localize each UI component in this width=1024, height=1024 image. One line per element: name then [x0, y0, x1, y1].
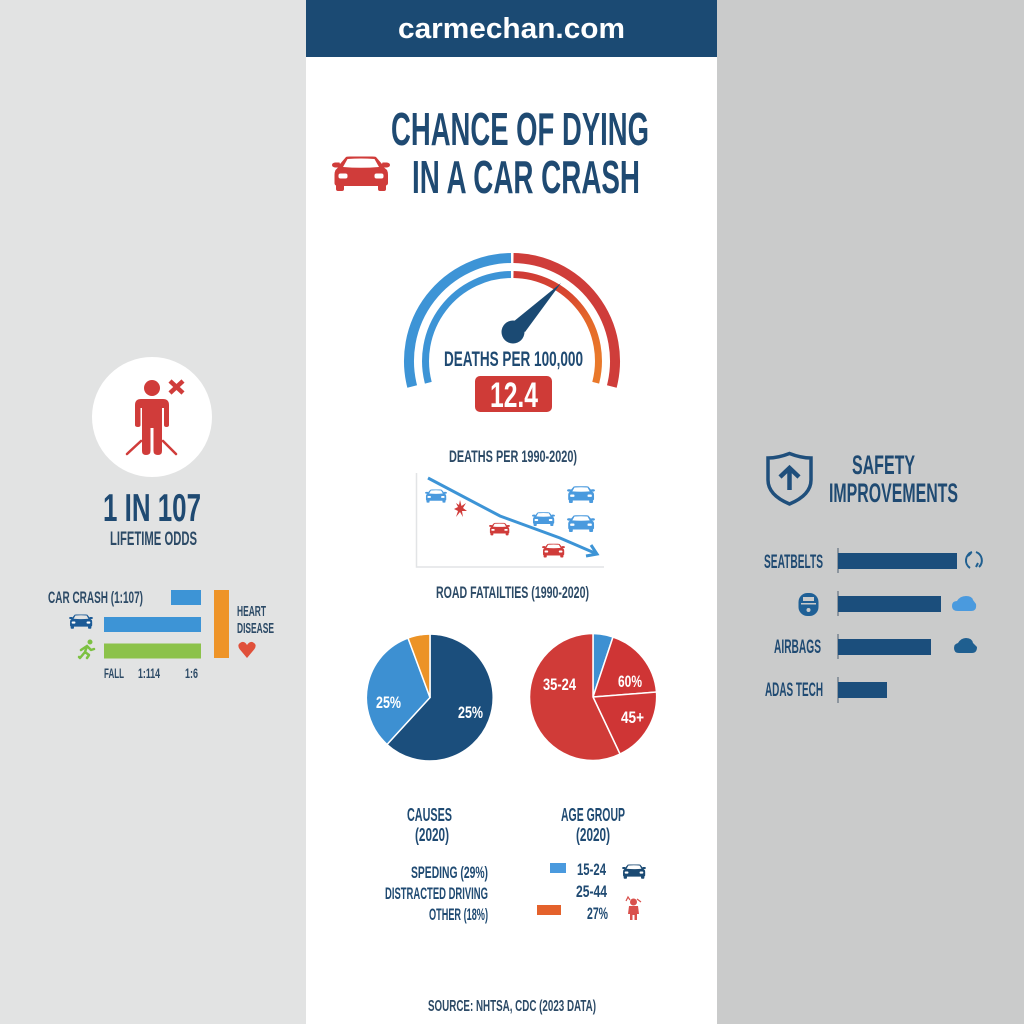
chart red car icons: [454, 500, 565, 557]
icon row: [798, 591, 976, 616]
source note: SOURCE: NHTSA, CDC (2023 DATA): [428, 998, 596, 1015]
causes heading: [407, 805, 452, 845]
age group legend: 15-24: [577, 860, 606, 879]
right background panel: [717, 0, 1024, 1024]
age group legend: 27%: [587, 904, 608, 923]
pie chart: causes: 25%: [458, 703, 483, 722]
gauge value: 12.4: [490, 376, 538, 415]
pie chart: age group: [530, 634, 657, 760]
axis values: 1:114: [138, 665, 160, 681]
trend line: [428, 478, 597, 556]
gauge needle: [502, 283, 561, 344]
age group heading: [561, 805, 625, 845]
age group heading: AGE GROUP: [561, 805, 625, 825]
icon: seat badge: [798, 593, 818, 616]
causes heading: CAUSES: [407, 805, 452, 825]
bars: [104, 590, 229, 658]
pie chart: causes: 25%: [376, 693, 401, 712]
causes legend: DISTRACTED DRIVING: [385, 884, 488, 903]
age group legend: [537, 860, 646, 923]
car crash label: CAR CRASH (1:107): [48, 588, 143, 607]
heart disease label: DISEASE: [237, 620, 274, 637]
header band: carmechan.com: [398, 13, 625, 45]
age group heading: (2020): [576, 825, 610, 845]
axis values: [104, 665, 198, 681]
heart disease label: HEART: [237, 603, 266, 620]
title: IN A CAR CRASH: [412, 151, 640, 203]
gauge: [409, 258, 615, 386]
icon: blue car: [69, 614, 93, 629]
causes legend: SPEDING (29%): [411, 863, 488, 882]
left background panel: [0, 0, 306, 1024]
icon: person at risk in white circle: [92, 357, 212, 477]
airbags row: [774, 634, 977, 659]
icon: small blue car: [622, 864, 646, 879]
lifetime odds label: LIFETIME ODDS: [110, 529, 197, 550]
icon: light blue cloud: [952, 596, 976, 611]
central white panel: [306, 0, 717, 1024]
pie chart: causes: [366, 634, 493, 761]
pie chart: age group: 35-24: [543, 675, 576, 694]
icon: seatbelt loops: [966, 552, 982, 568]
icon: running figure: [79, 640, 94, 658]
heart disease label: [237, 603, 274, 637]
seatbelts row: [764, 548, 982, 573]
line chart caption: ROAD FATAILTIES (1990-2020): [436, 583, 589, 602]
safety bar chart: [764, 548, 982, 703]
header band: [306, 0, 717, 57]
chart car icons: [425, 486, 595, 532]
airbags row: AIRBAGS: [774, 637, 821, 658]
icon: dark blue cloud: [954, 638, 977, 653]
pie chart: age group: 60%: [618, 672, 642, 691]
icon: heart: [238, 642, 256, 658]
adas tech row: ADAS TECH: [765, 680, 823, 701]
line chart: [416, 473, 604, 567]
age group legend: 25-44: [576, 882, 607, 901]
line chart heading: DEATHS PER 1990-2020): [449, 447, 577, 466]
causes legend: OTHER (18%): [429, 905, 488, 924]
comparison bar chart: [48, 588, 274, 681]
gauge label: DEATHS PER 100,000: [444, 348, 583, 371]
icon: red car: [332, 156, 390, 191]
axis values: 1:6: [185, 665, 198, 681]
title: CHANCE OF DYING: [391, 103, 649, 155]
icon: small red person: [626, 897, 641, 920]
axis values: FALL: [104, 665, 124, 681]
safety improvements heading: SAFETY: [852, 450, 915, 480]
causes legend: [385, 863, 488, 924]
title: [391, 103, 649, 203]
icon: shield with arrow: [768, 454, 811, 504]
seatbelts row: SEATBELTS: [764, 552, 823, 573]
causes heading: (2020): [415, 825, 449, 845]
lifetime odds figure: 1 IN 107: [103, 487, 201, 530]
safety improvements heading: [829, 450, 958, 508]
pie chart: age group: 45+: [621, 708, 644, 727]
